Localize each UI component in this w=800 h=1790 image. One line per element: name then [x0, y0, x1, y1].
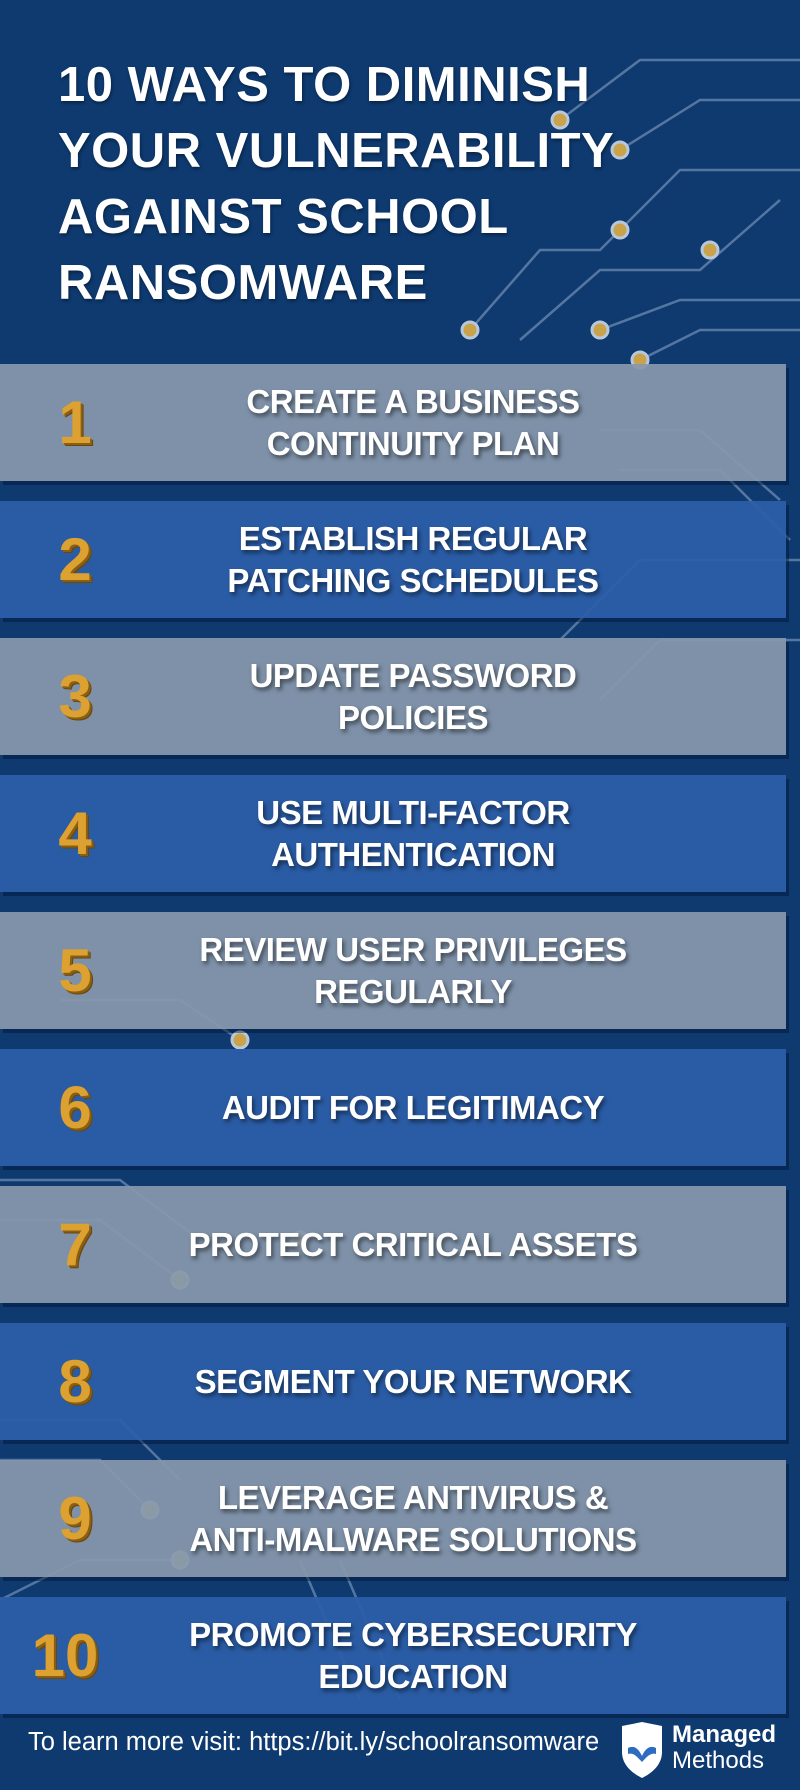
title: 10 WAYS TO DIMINISH: [58, 58, 590, 112]
logo: Methods: [672, 1747, 764, 1774]
item 8: SEGMENT YOUR NETWORK: [195, 1362, 631, 1400]
item 2: PATCHING SCHEDULES: [227, 562, 599, 598]
icon: shield: [622, 1722, 662, 1778]
item 9: ANTI-MALWARE SOLUTIONS: [189, 1520, 637, 1558]
item 3: POLICIES: [338, 698, 488, 736]
item 3: [0, 638, 786, 755]
item 10: EDUCATION: [318, 1658, 508, 1694]
item 4: [0, 775, 786, 892]
item 2: [0, 501, 786, 618]
item 5: [0, 912, 786, 1029]
logo: [622, 1721, 776, 1778]
title: RANSOMWARE: [58, 256, 428, 310]
title: YOUR VULNERABILITY: [58, 124, 614, 178]
item 4: 4: [58, 800, 92, 867]
item 7: 7: [58, 1211, 92, 1278]
item 9: 9: [58, 1485, 92, 1552]
item 10: PROMOTE CYBERSECURITY: [189, 1616, 637, 1652]
item 1: CONTINUITY PLAN: [267, 424, 559, 462]
item 4: AUTHENTICATION: [271, 836, 555, 872]
item 3: UPDATE PASSWORD: [250, 656, 576, 694]
title: AGAINST SCHOOL: [58, 190, 509, 244]
item 7: [0, 1186, 786, 1303]
logo: Managed: [672, 1721, 776, 1748]
footer text: To learn more visit: https://bit.ly/schoolransomware: [28, 1728, 599, 1756]
item 4: USE MULTI-FACTOR: [256, 794, 570, 830]
item 3: 3: [58, 663, 92, 730]
item 10: 10: [32, 1622, 98, 1689]
item 6: 6: [58, 1074, 92, 1141]
item 8: [0, 1323, 786, 1440]
item 1: CREATE A BUSINESS: [246, 382, 580, 420]
item 1: [0, 364, 786, 481]
item 7: PROTECT CRITICAL ASSETS: [189, 1226, 637, 1262]
title: [58, 58, 614, 310]
item 9: LEVERAGE ANTIVIRUS &: [218, 1478, 608, 1516]
item 10: [0, 1597, 786, 1714]
item 2: 2: [58, 526, 92, 593]
item 2: ESTABLISH REGULAR: [239, 520, 587, 556]
item 6: AUDIT FOR LEGITIMACY: [222, 1088, 604, 1126]
item 8: 8: [58, 1348, 92, 1415]
item 5: REVIEW USER PRIVILEGES: [199, 930, 627, 968]
item 6: [0, 1049, 786, 1166]
item 5: REGULARLY: [314, 972, 512, 1010]
item 5: 5: [58, 937, 92, 1004]
item 1: 1: [58, 389, 92, 456]
item 9: [0, 1460, 786, 1577]
